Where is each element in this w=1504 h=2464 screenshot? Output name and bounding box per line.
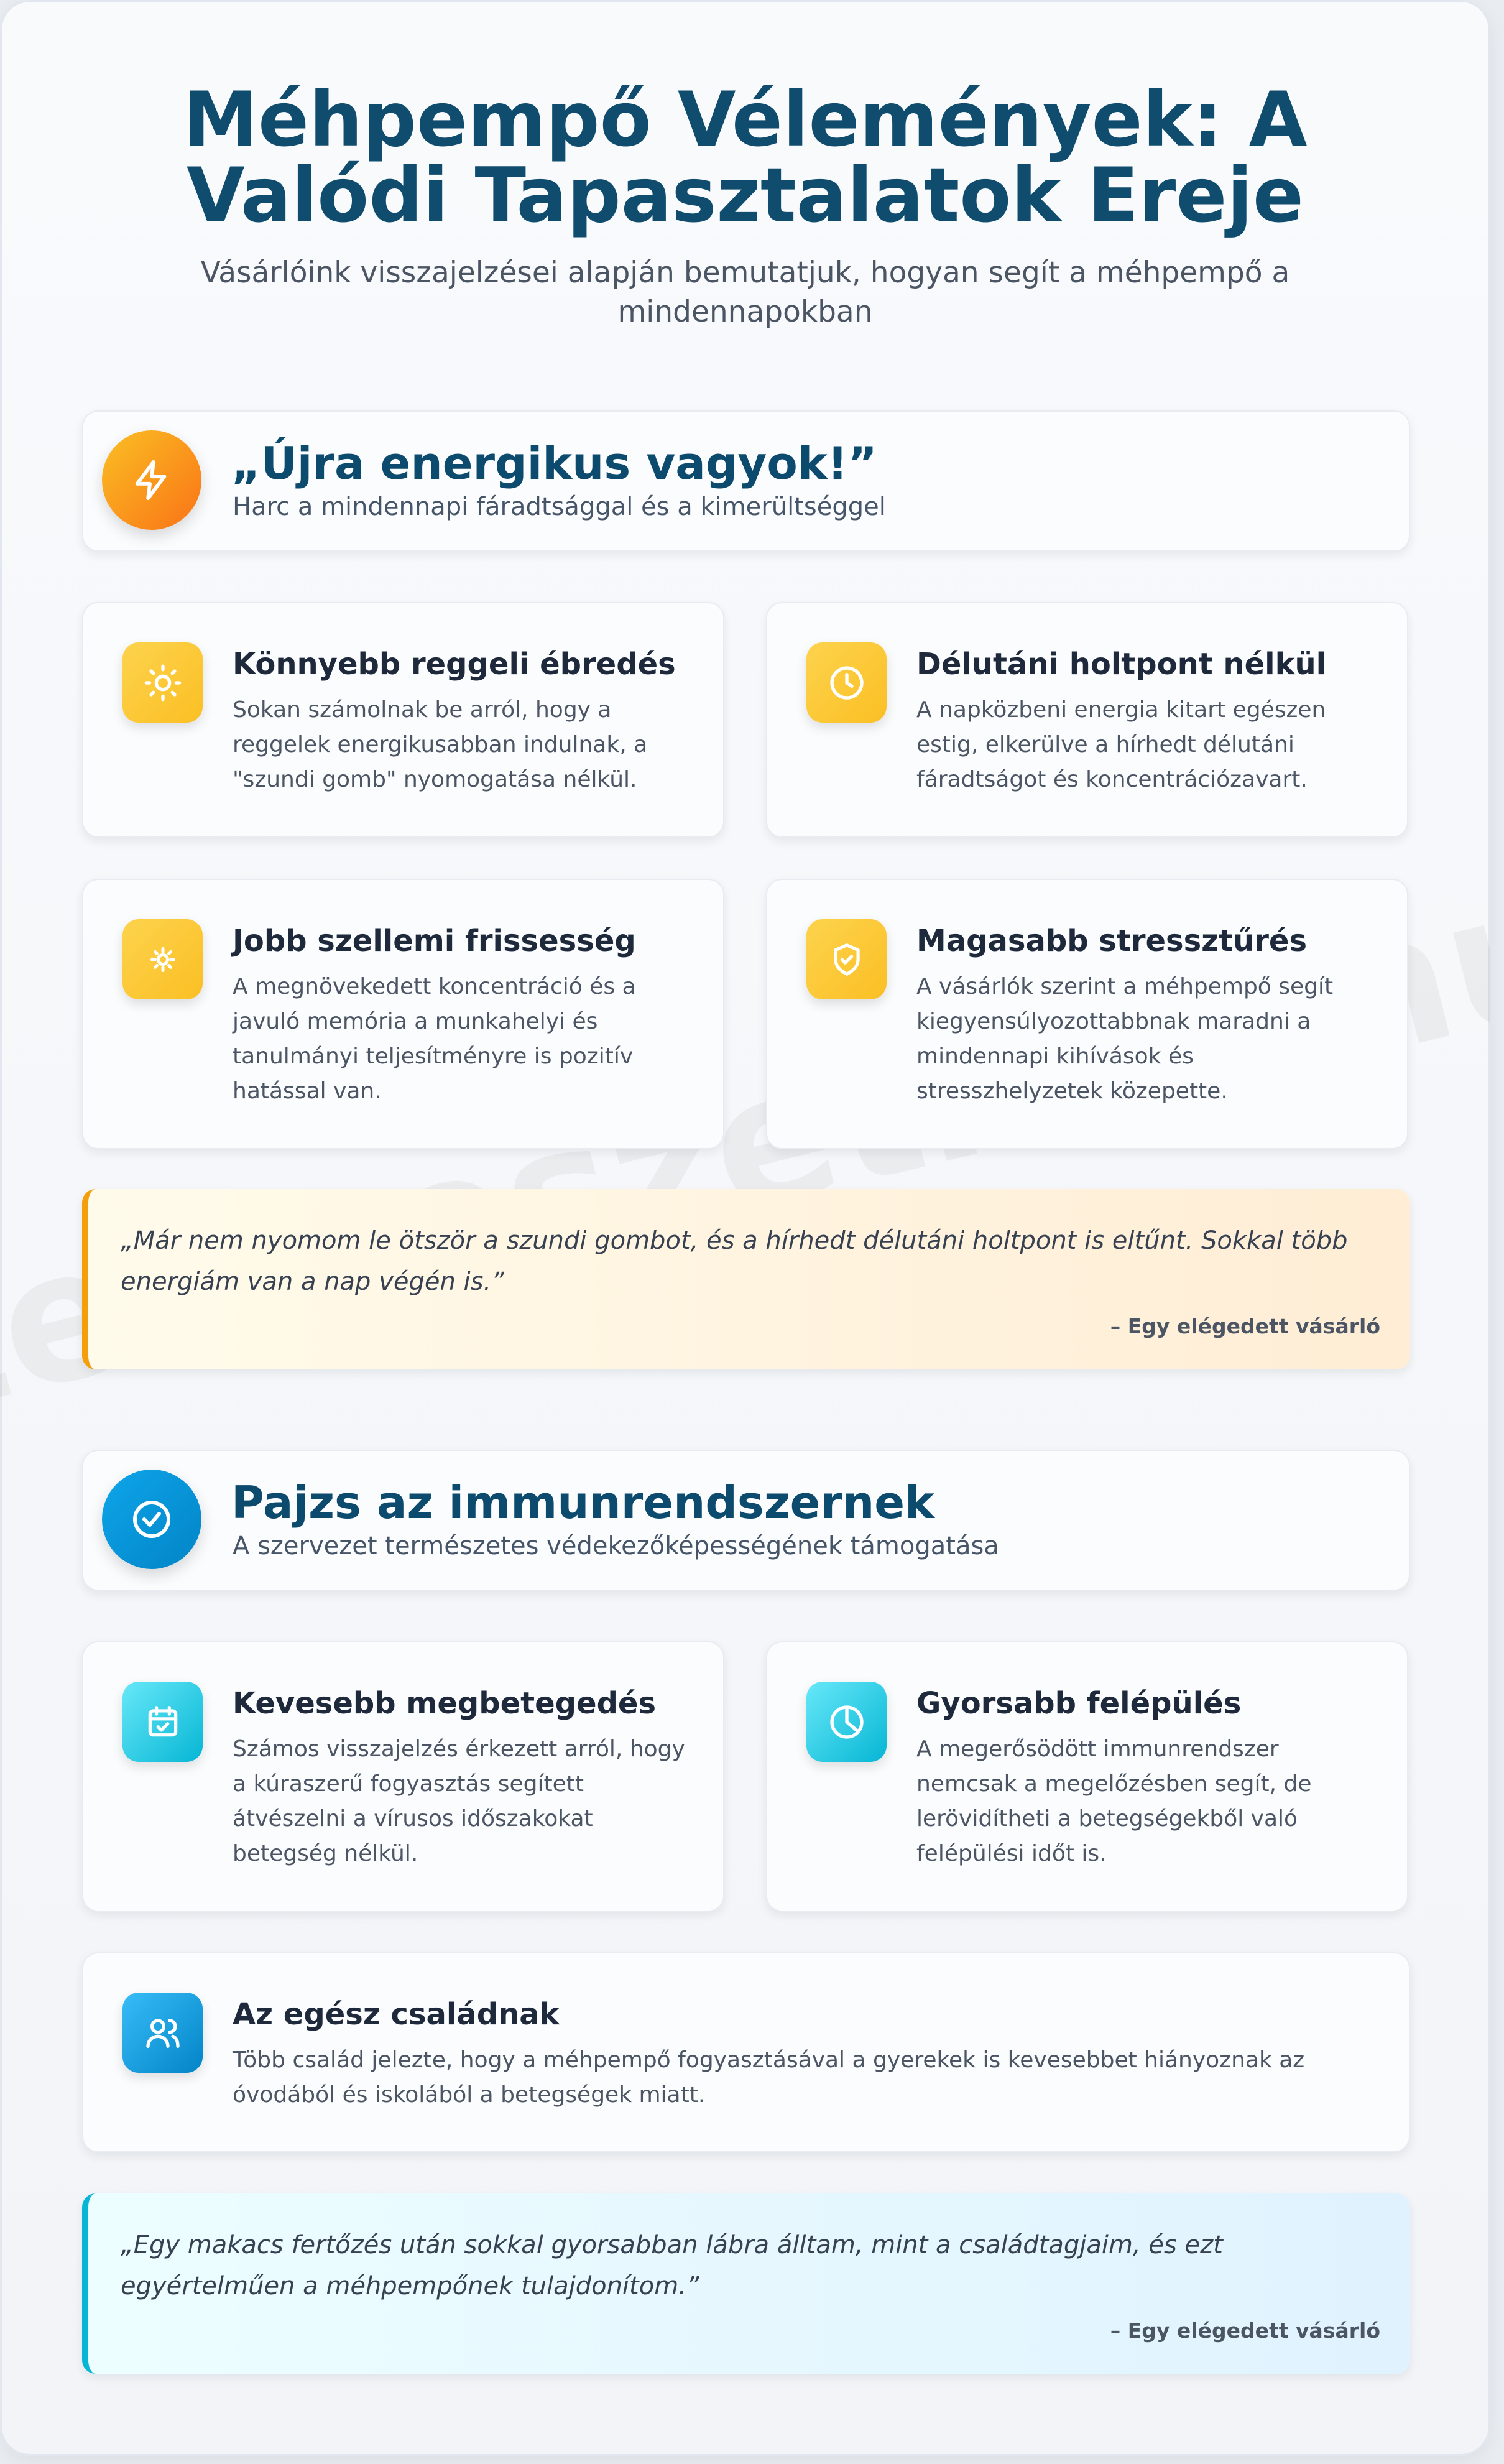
title: Az egész családnak [233,1997,560,2032]
card: afternoon [766,602,1408,838]
section header: energy [82,410,1410,552]
subtitle [201,256,1289,329]
icon: check circle [102,1470,201,1569]
text: stresszhelyzetek közepette. [916,1078,1228,1104]
text: A megerősödött immunrendszer [916,1736,1279,1762]
text: estig, elkerülve a hírhedt délutáni [916,732,1294,757]
icon: lightning [102,430,201,530]
title: Kevesebb megbetegedés [233,1686,656,1721]
icon: people [122,1993,203,2073]
text [233,1736,685,1866]
text: mindennapi kihívások és [916,1044,1194,1069]
text: A napközbeni energia kitart egészen [916,697,1326,723]
title [183,76,1307,239]
title: Jobb szellemi frissesség [233,924,636,958]
text: átvészelni a vírusos időszakokat [233,1806,593,1832]
text: hatással van. [233,1078,382,1104]
attribution: – Egy elégedett vásárló [1110,1314,1380,1338]
text: reggelek energikusabban indulnak, a [233,732,647,757]
text: A vásárlók szerint a méhpempő segít [916,974,1333,999]
text: nemcsak a megelőzésben segít, de [916,1771,1312,1797]
text: kiegyensúlyozottabbnak maradni a [916,1009,1311,1034]
text [232,974,636,1104]
card: fewer illness [82,1641,724,1912]
heading: „Újra energikus vagyok!” [231,437,877,489]
quote text [121,1226,1348,1296]
text [233,697,647,792]
icon: calendar [122,1682,203,1762]
title: Délutáni holtpont nélkül [916,647,1326,682]
text: Számos visszajelzés érkezett arról, hogy [233,1736,685,1762]
subheading: A szervezet természetes védekezőképességének támogatása [233,1532,999,1560]
attribution: – Egy elégedett vásárló [1110,2318,1380,2343]
icon: shield [806,919,887,999]
text: a kúraszerű fogyasztás segített [233,1771,584,1797]
heading: Pajzs az immunrendszernek [231,1476,934,1529]
icon: sun [122,642,203,723]
text: A megnövekedett koncentráció és a [233,974,636,999]
icon: clock [806,642,887,723]
title: Könnyebb reggeli ébredés [233,647,676,682]
title: Méhpempő Vélemények: A [183,76,1307,164]
section header: immune [82,1450,1410,1591]
text: lerövidítheti a betegségekből való [916,1806,1298,1832]
text: Több család jelezte, hogy a méhpempő fogyasztásával a gyerekek is kevesebbet hiányoznak az [233,2047,1304,2073]
text: felépülési időt is. [916,1841,1107,1866]
card: stress [766,879,1408,1149]
icon: pie clock [806,1682,887,1762]
subtitle: mindennapokban [618,295,873,329]
icon: sun small [122,919,203,999]
text [233,2047,1304,2108]
text [916,1736,1312,1866]
quote text: „Már nem nyomom le ötször a szundi gombot, és a hírhedt délutáni holtpont is eltűnt. Sokkal több [121,1226,1348,1255]
subheading: Harc a mindennapi fáradtsággal és a kimerültséggel [233,493,886,521]
text: "szundi gomb" nyomogatása nélkül. [233,767,637,792]
card: family [82,1952,1410,2152]
text: javuló memória a munkahelyi és [233,1009,597,1034]
text: fáradtságot és koncentrációzavart. [916,767,1308,792]
text [916,697,1326,792]
quote 2 [82,2193,1410,2374]
subtitle: Vásárlóink visszajelzései alapján bemutatjuk, hogyan segít a méhpempő a [201,256,1289,290]
card: morning [82,602,724,838]
quote text [121,2231,1224,2300]
text: óvodából és iskolából a betegségek miatt. [233,2082,705,2108]
title: Gyorsabb felépülés [916,1686,1241,1721]
card: recovery [766,1641,1408,1912]
text: Sokan számolnak be arról, hogy a [233,697,612,723]
quote text: energiám van a nap végén is.” [121,1267,504,1296]
title: Magasabb stressztűrés [916,924,1307,958]
card: mental [82,879,724,1149]
quote text: egyértelműen a méhpempőnek tulajdonítom.” [121,2272,699,2300]
quote 1 [82,1189,1410,1369]
text: betegség nélkül. [233,1841,418,1866]
text [916,974,1333,1104]
quote text: „Egy makacs fertőzés után sokkal gyorsabban lábra álltam, mint a családtagjaim, és ezt [121,2231,1223,2259]
text: tanulmányi teljesítményre is pozitív [233,1044,633,1069]
title: Valódi Tapasztalatok Ereje [187,152,1304,239]
